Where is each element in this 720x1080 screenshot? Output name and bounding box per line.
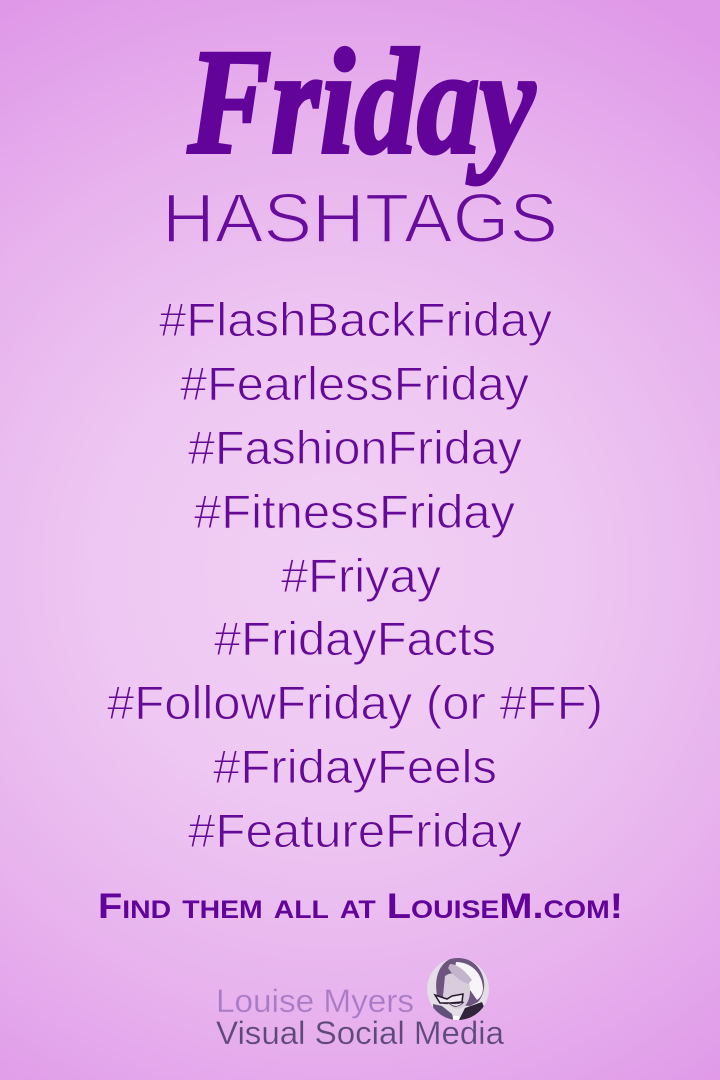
hashtag: FridayFacts: #FridayFacts [214,612,496,665]
brand name: Louise Myers: Louise Myers [216,983,414,1019]
hashtag: FearlessFriday: #FearlessFriday [180,357,530,410]
title: Friday: Friday [187,19,536,185]
hashtag list [107,293,603,857]
hashtag: FollowFriday or FF: #FollowFriday (or #FF) [107,676,603,729]
hashtag: FeatureFriday: #FeatureFriday [188,804,523,857]
hashtag: FashionFriday: #FashionFriday [188,421,523,474]
hashtag: FridayFeels: #FridayFeels [213,740,497,793]
hashtag: Friyay: #Friyay [281,549,442,602]
brand tagline: Visual Social Media: Visual Social Media [216,1015,504,1051]
hashtag: FitnessFriday: #FitnessFriday [194,485,516,538]
icon: author portrait [427,958,490,1022]
subtitle: HASHTAGS: HASHTAGS [162,179,558,257]
call to action: Find them all at LouiseM.com! [98,887,623,926]
hashtag: FlashBackFriday: #FlashBackFriday [159,293,553,346]
